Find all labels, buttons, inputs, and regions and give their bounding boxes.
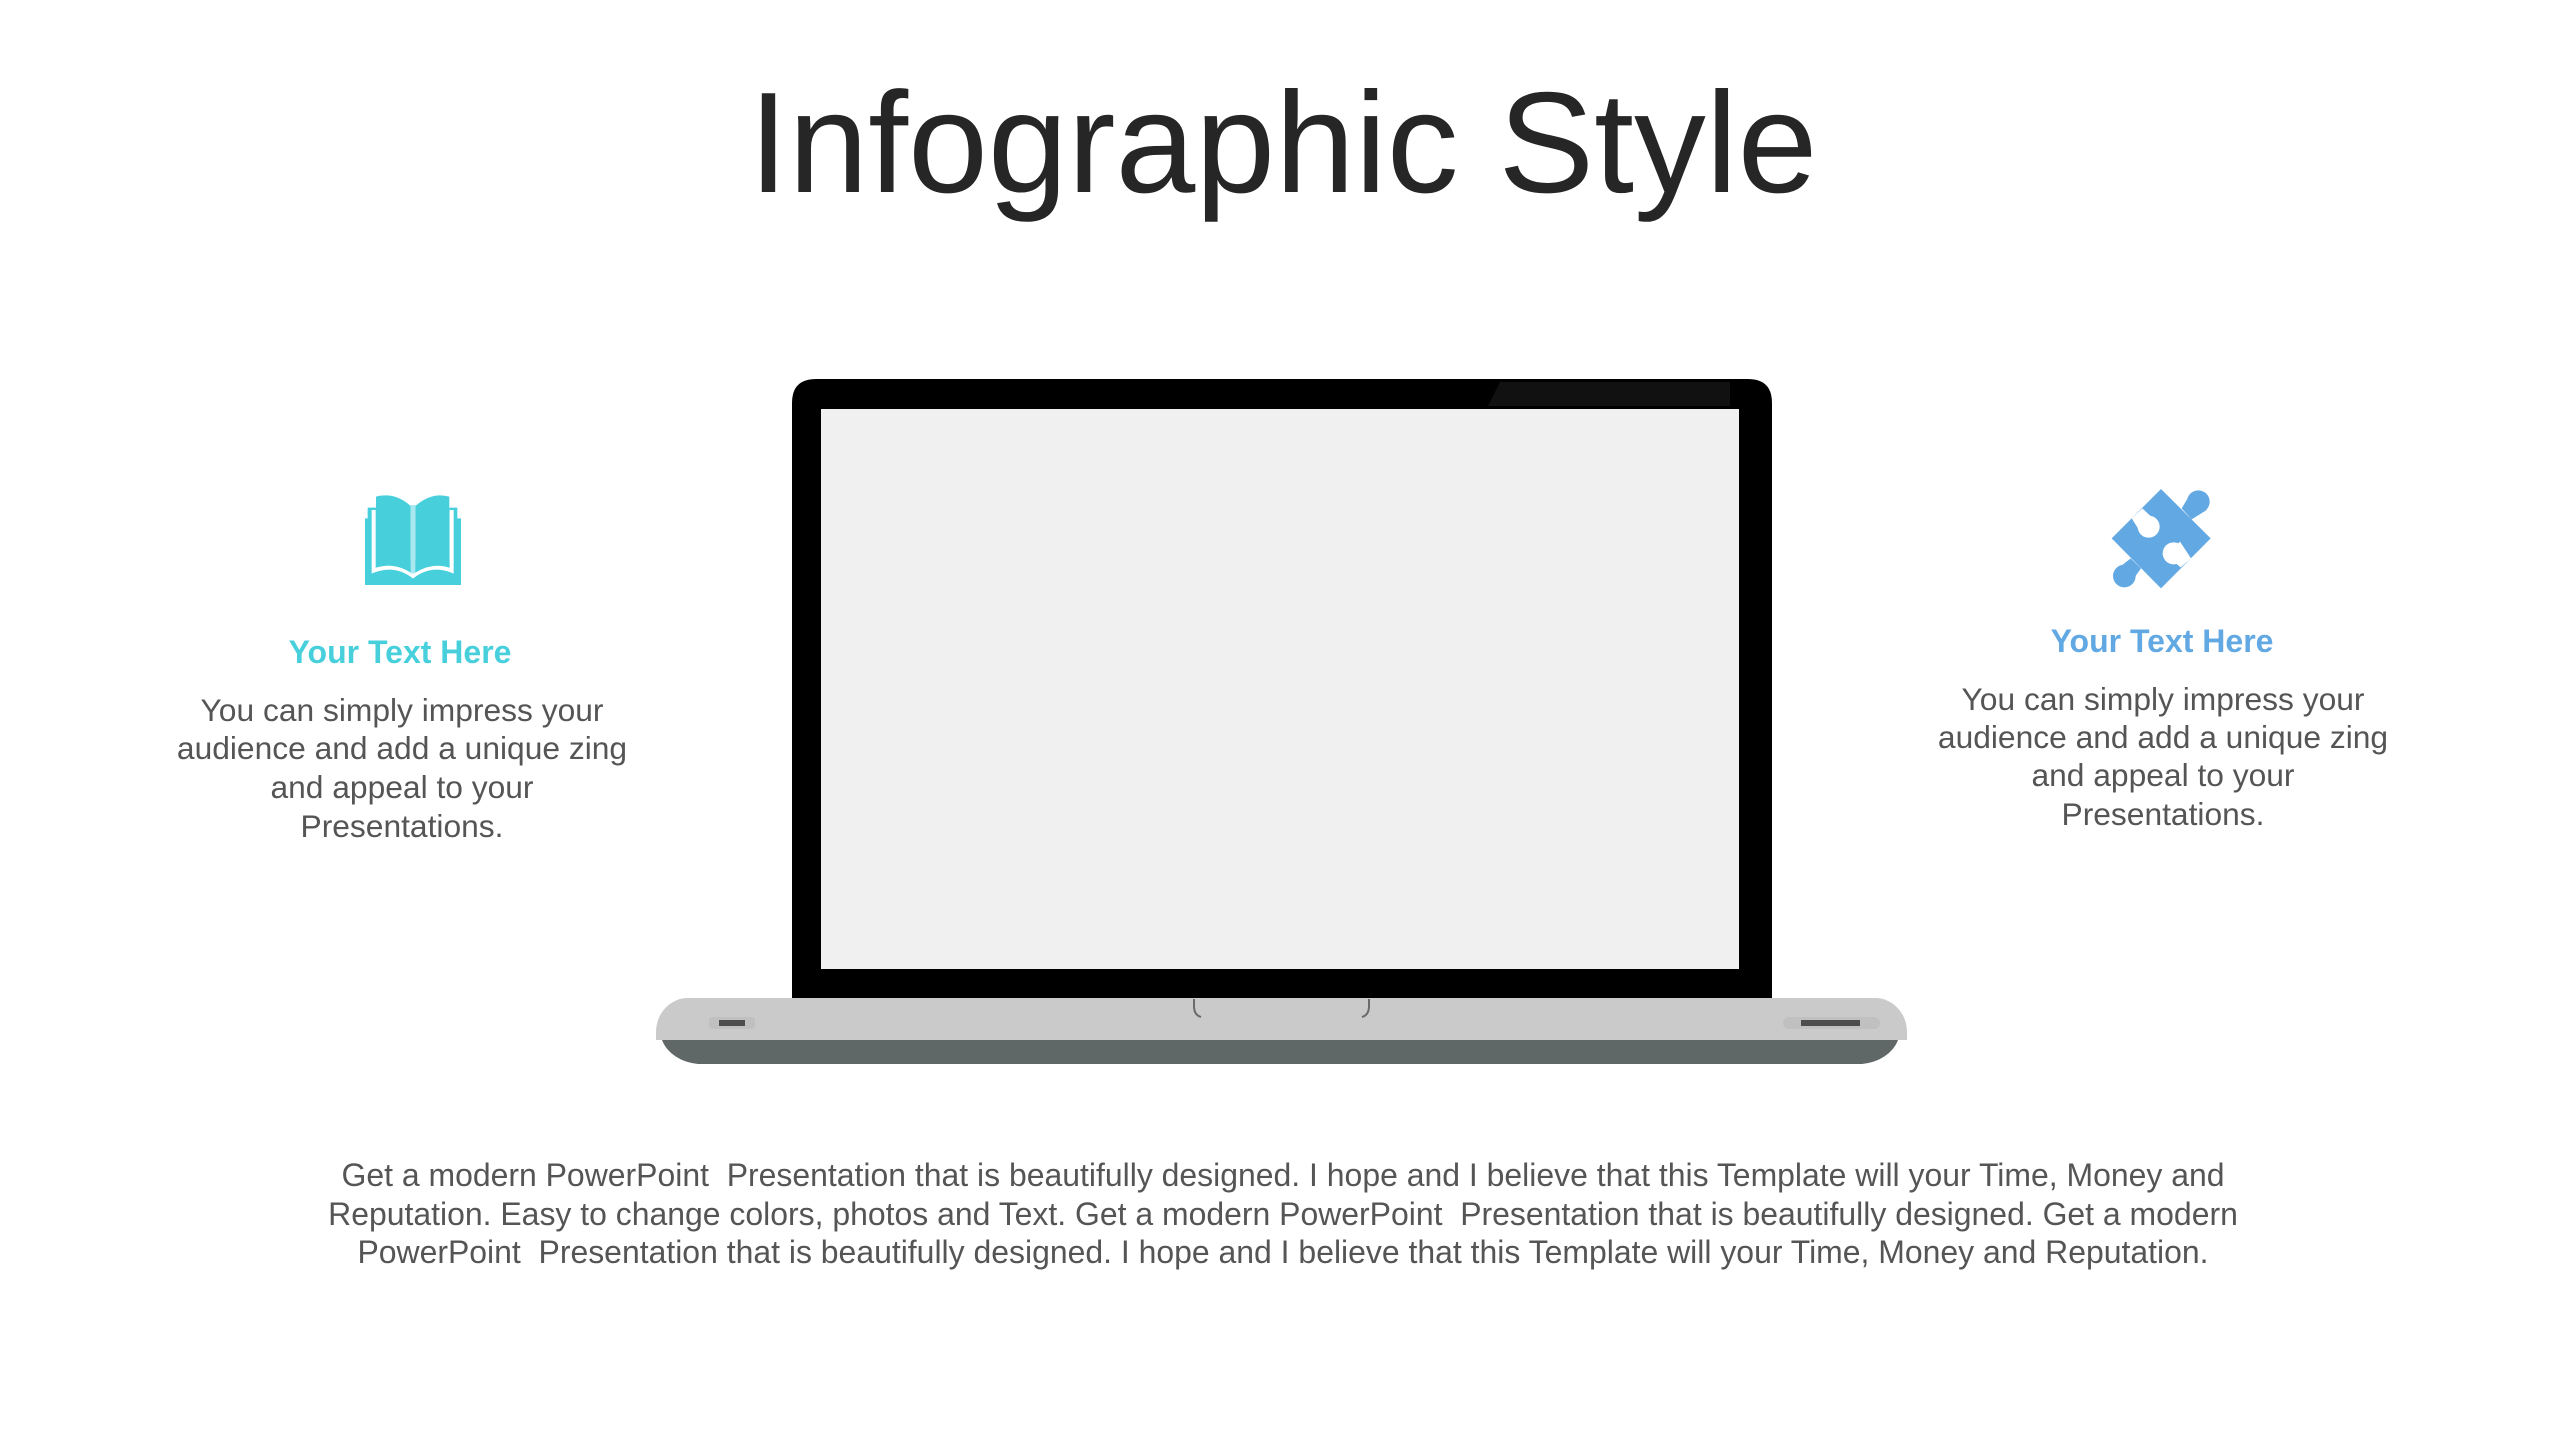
right heading: Your Text Here: [2051, 623, 2273, 659]
left heading: Your Text Here: [289, 634, 511, 670]
left port: [709, 1017, 755, 1029]
left body line 3: and appeal to your: [270, 769, 534, 805]
bottom line 3: PowerPoint Presentation that is beautifully designed. I hope and I believe that this Template will your Time, Money and Reputation.: [357, 1234, 2209, 1270]
right port: [1783, 1017, 1880, 1029]
bottom line 2: Reputation. Easy to change colors, photos and Text. Get a modern PowerPoint Presentation that is beautifully designed. Get a modern: [328, 1196, 2238, 1232]
right body line 2: audience and add a unique zing: [1938, 719, 2388, 755]
panel: left text: [177, 634, 627, 844]
panel: right text: [1938, 623, 2388, 832]
laptop screen: [821, 409, 1739, 969]
laptop base bottom: [662, 1040, 1898, 1064]
left body line 4: Presentations.: [301, 808, 503, 844]
right body line 3: and appeal to your: [2031, 757, 2295, 793]
right body line 1: You can simply impress your: [1962, 681, 2364, 717]
bottom paragraph: [328, 1157, 2238, 1270]
right body line 4: Presentations.: [2062, 796, 2264, 832]
icon: puzzle piece: [2112, 489, 2211, 588]
laptop lid: [792, 379, 1772, 998]
bottom line 1: Get a modern PowerPoint Presentation that is beautifully designed. I hope and I believe that this Template will your Time, Money and: [341, 1157, 2225, 1193]
laptop base top: [656, 998, 1907, 1040]
left body line 1: You can simply impress your: [201, 692, 603, 728]
glare: [1488, 382, 1730, 406]
trackpad notch: [1194, 999, 1369, 1017]
laptop illustration: [656, 379, 1907, 1064]
title: Infographic Style: [749, 63, 1817, 223]
icon: book: [365, 495, 461, 585]
left body line 2: audience and add a unique zing: [177, 730, 627, 766]
